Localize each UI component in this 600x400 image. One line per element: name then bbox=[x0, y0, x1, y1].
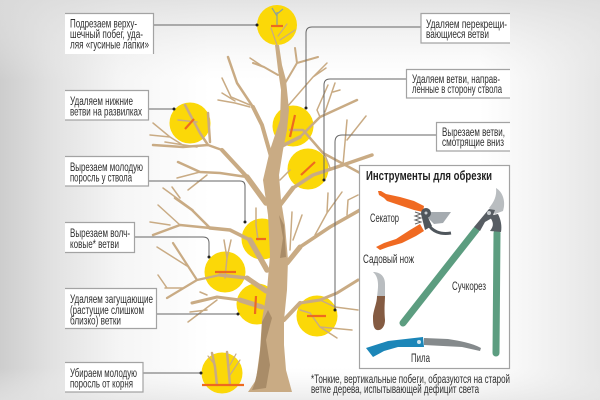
label: toward trunk: ленные в сторону ствола bbox=[412, 84, 502, 96]
left mid branch one bbox=[247, 177, 266, 203]
label: dense branches: Удаляем загущающие bbox=[70, 294, 153, 306]
label: lower forks: ветви на развилках bbox=[70, 106, 142, 118]
label: lower forks bbox=[65, 90, 149, 120]
crossing branch bbox=[290, 130, 360, 173]
right lower branch bbox=[284, 303, 300, 320]
left branch four bbox=[247, 278, 266, 291]
label: crossing branches bbox=[421, 13, 510, 43]
label: dense branches: (растущие слишком bbox=[70, 305, 144, 317]
right upper branch bbox=[280, 137, 300, 147]
root shoots bbox=[212, 352, 230, 385]
label: facing down bbox=[436, 122, 510, 151]
top shoot bbox=[272, 8, 283, 27]
footnote bbox=[311, 374, 510, 396]
label: lopper: Сучкорез bbox=[452, 281, 486, 293]
label: crossing branches: вающиеся ветви bbox=[426, 29, 489, 41]
label: saw: Пила bbox=[411, 353, 430, 365]
left mid branch two bbox=[178, 162, 247, 177]
label: root growth bbox=[65, 362, 143, 392]
tree bbox=[150, 8, 372, 392]
panel: pruning tools bbox=[360, 166, 510, 368]
footnote: ветке дерева, испытывающей дефицит света bbox=[311, 384, 479, 396]
orange cut marks bbox=[185, 26, 326, 385]
label: top shoot: Подрезаем верху- bbox=[70, 18, 137, 30]
upper left branches bbox=[253, 107, 272, 160]
label: secateurs: Секатор bbox=[370, 213, 399, 225]
label: water sprouts bbox=[65, 222, 135, 252]
label: trunk growth: поросль у ствола bbox=[70, 172, 132, 184]
right mid branch bbox=[287, 247, 300, 263]
icon: secateurs bbox=[376, 191, 451, 250]
label: garden knife: Садовый нож bbox=[363, 254, 414, 266]
label: root growth: Убираем молодую bbox=[70, 368, 137, 380]
label: toward trunk: Удаляем ветви, направ- bbox=[412, 74, 500, 86]
label: water sprouts: Вырезаем волч- bbox=[70, 228, 130, 240]
trunk bbox=[248, 45, 292, 392]
callout leader lines bbox=[135, 24, 436, 374]
right branch bbox=[280, 188, 293, 205]
icon: garden knife bbox=[373, 272, 385, 330]
yellow highlight circles bbox=[170, 5, 338, 394]
label: facing down: Вырезаем ветви, bbox=[442, 127, 505, 139]
label: facing down: смотрящие вниз bbox=[442, 137, 504, 149]
bark shading bbox=[252, 215, 286, 390]
label: water sprouts: ковые* ветви bbox=[70, 239, 119, 251]
label: top shoot bbox=[65, 13, 154, 54]
top twigs bbox=[253, 48, 318, 85]
label: crossing branches: Удаляем перекрещи- bbox=[426, 19, 507, 31]
label: trunk growth bbox=[65, 156, 149, 186]
label: lower forks: Удаляем нижние bbox=[70, 96, 133, 108]
label: top shoot: шечный побег, уда- bbox=[70, 29, 143, 41]
label: trunk growth: Вырезаем молодую bbox=[70, 162, 143, 174]
label: top shoot: ляя «гусиные лапки» bbox=[70, 40, 149, 52]
left branch five bbox=[240, 300, 262, 307]
icon: saw bbox=[366, 337, 481, 357]
icon: lopper bbox=[403, 188, 504, 353]
left branch three bbox=[250, 240, 267, 270]
label: dense branches: близко) ветки bbox=[70, 316, 121, 328]
panel heading: Инструменты для обрезки bbox=[366, 169, 492, 183]
footnote: *Тонкие, вертикальные побеги, образуются на старой bbox=[311, 374, 510, 386]
label: dense branches bbox=[65, 288, 156, 329]
label: root growth: поросль от корня bbox=[70, 378, 133, 390]
label: toward trunk bbox=[406, 69, 510, 98]
